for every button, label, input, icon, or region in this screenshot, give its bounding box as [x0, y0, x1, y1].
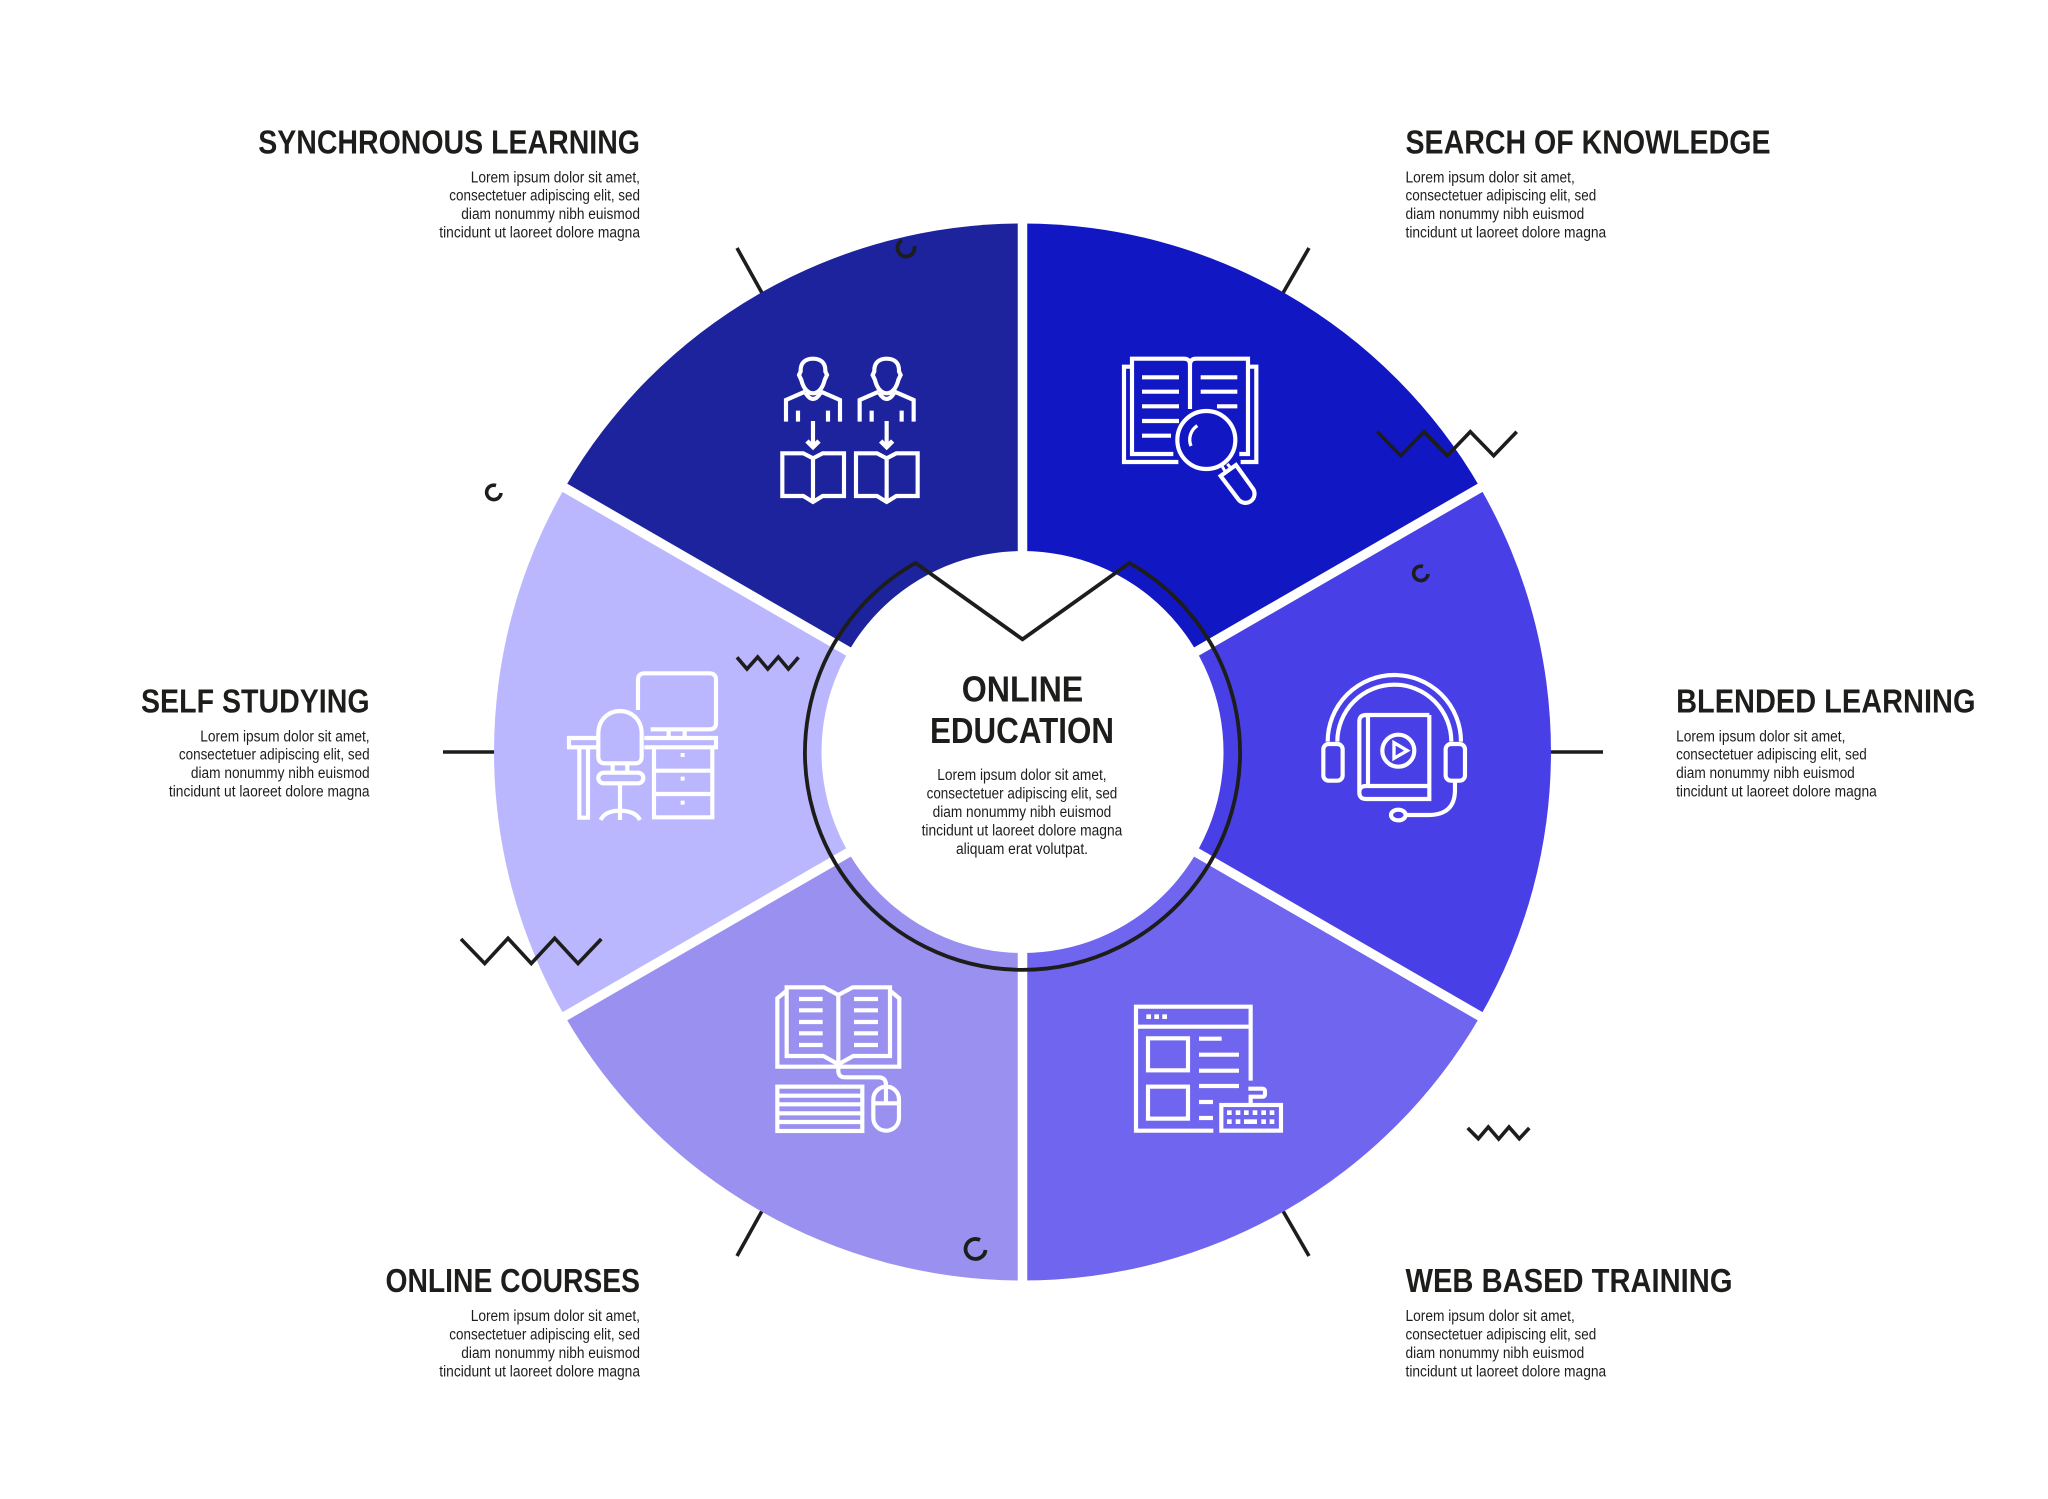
label: search of knowledge: SEARCH OF KNOWLEDGE: [1406, 123, 1770, 160]
center white circle: [822, 551, 1224, 953]
label: synchronous learning: Lorem ipsum dolor sit amet,: [471, 169, 640, 186]
label: web based training: consectetuer adipiscing elit, sed: [1406, 1326, 1596, 1343]
zigzag: top right: [1377, 432, 1517, 456]
center title and text: consectetuer adipiscing elit, sed: [927, 786, 1117, 802]
label: online courses: ONLINE COURSES: [386, 1262, 640, 1299]
center title and text: aliquam erat volutpat.: [956, 841, 1088, 858]
label: blended learning: tincidunt ut laoreet dolore magna: [1676, 784, 1877, 801]
label: self studying: SELF STUDYING: [141, 682, 370, 719]
label: blended learning: consectetuer adipiscing elit, sed: [1676, 747, 1867, 764]
label: blended learning: Lorem ipsum dolor sit amet,: [1676, 728, 1845, 745]
label: synchronous learning: diam nonummy nibh euismod: [461, 206, 640, 223]
label: online courses: tincidunt ut laoreet dolore magna: [439, 1363, 640, 1380]
label: online courses: consectetuer adipiscing elit, sed: [449, 1326, 640, 1343]
segment: online courses: [565, 752, 1022, 1280]
label: web based training: diam nonummy nibh euismod: [1406, 1345, 1584, 1362]
zigzag: lower left: [461, 938, 601, 964]
center title and text: tincidunt ut laoreet dolore magna: [922, 822, 1123, 840]
decorative c: top: [898, 240, 915, 256]
decorative c: left: [487, 485, 501, 500]
label: online courses: Lorem ipsum dolor sit amet,: [471, 1308, 640, 1325]
label: blended learning: BLENDED LEARNING: [1676, 682, 1976, 719]
label: search of knowledge: tincidunt ut laoreet dolore magna: [1406, 225, 1607, 242]
decorative c: bottom: [966, 1239, 986, 1259]
label: web based training: tincidunt ut laoreet dolore magna: [1406, 1363, 1607, 1380]
icon: headset with video book: [1323, 675, 1465, 820]
segment: web based training: [1022, 752, 1480, 1280]
decorative c: right: [1414, 566, 1428, 581]
label: web based training: Lorem ipsum dolor sit amet,: [1406, 1308, 1575, 1325]
label: synchronous learning: [258, 123, 640, 242]
segment: blended learning: [1022, 488, 1551, 1016]
label: blended learning: diam nonummy nibh euismod: [1676, 765, 1855, 782]
center title and text: [922, 668, 1123, 858]
center title and text: diam nonummy nibh euismod: [933, 804, 1111, 821]
center title and text: Lorem ipsum dolor sit amet,: [937, 767, 1107, 784]
label: search of knowledge: [1406, 123, 1770, 242]
icon: two learners with books: [782, 359, 918, 502]
black ring with V notch: [805, 563, 1240, 970]
label: search of knowledge: diam nonummy nibh euismod: [1406, 206, 1584, 223]
label: synchronous learning: SYNCHRONOUS LEARNING: [258, 123, 640, 160]
zigzag: bottom right small: [1468, 1127, 1529, 1139]
label: online courses: [386, 1262, 640, 1380]
label: search of knowledge: Lorem ipsum dolor sit amet,: [1406, 169, 1575, 186]
icon: web page and keyboard: [1136, 1007, 1281, 1131]
segment: synchronous learning: [565, 224, 1022, 752]
center title and text: ONLINE: [962, 668, 1083, 710]
label: synchronous learning: consectetuer adipiscing elit, sed: [449, 188, 640, 205]
label: self studying: tincidunt ut laoreet dolore magna: [169, 784, 370, 801]
label: synchronous learning: tincidunt ut laoreet dolore magna: [439, 225, 640, 242]
center title and text: EDUCATION: [930, 710, 1114, 751]
label: self studying: Lorem ipsum dolor sit amet,: [200, 728, 370, 745]
icon: book with magnifier: [1124, 359, 1256, 503]
panel: tick marks: [443, 248, 1603, 1256]
label: self studying: consectetuer adipiscing elit, sed: [179, 747, 370, 764]
segment: search of knowledge: [1022, 224, 1480, 752]
segment: self studying: [494, 488, 1023, 1016]
label: online courses: diam nonummy nibh euismod: [461, 1345, 640, 1362]
label: search of knowledge: consectetuer adipiscing elit, sed: [1406, 188, 1596, 205]
label: self studying: diam nonummy nibh euismod: [191, 765, 370, 782]
icon: desk with monitor and chair: [569, 673, 716, 820]
label: web based training: WEB BASED TRAINING: [1406, 1262, 1732, 1299]
label: blended learning: [1676, 682, 1976, 801]
icon: e-book, keyboard and mouse: [777, 987, 899, 1131]
zigzag: left segment small: [737, 657, 798, 669]
label: web based training: [1406, 1262, 1732, 1380]
label: self studying: [141, 682, 370, 801]
